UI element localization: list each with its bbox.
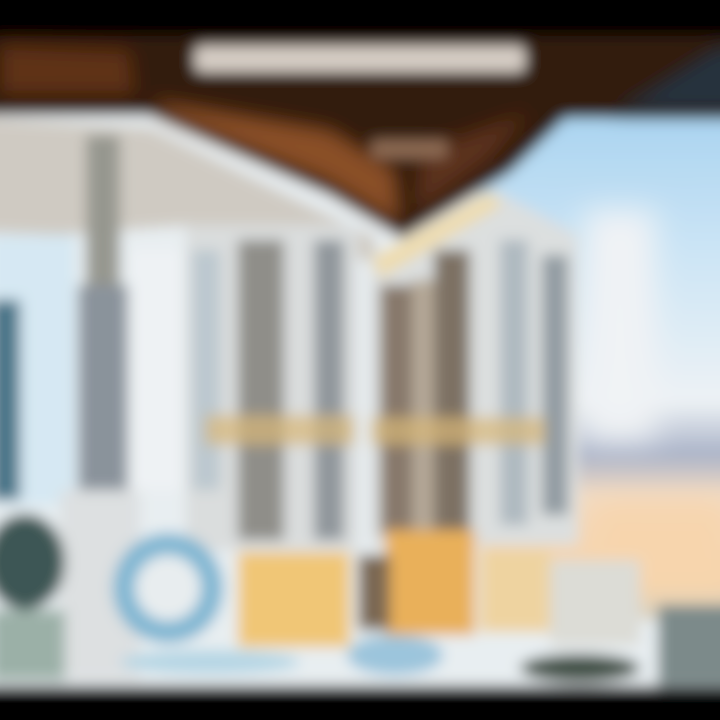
wooden ceiling	[0, 20, 720, 238]
central left window panel	[186, 225, 358, 550]
bottom black band	[0, 686, 720, 720]
lower golden panels	[238, 530, 640, 647]
top black band	[0, 0, 720, 36]
lower right dark block	[658, 605, 720, 685]
title	[195, 46, 525, 72]
left white wall band under ceiling	[0, 118, 375, 262]
left column	[60, 135, 182, 680]
dark plant left	[0, 514, 65, 680]
central right window panel	[370, 190, 578, 545]
golden horizontal band	[205, 415, 545, 445]
ring icon	[124, 544, 212, 632]
subtitle	[372, 140, 447, 158]
golden roof edge highlight	[372, 192, 502, 278]
far left dark glass	[0, 300, 20, 500]
lower foreground shapes	[120, 635, 640, 682]
